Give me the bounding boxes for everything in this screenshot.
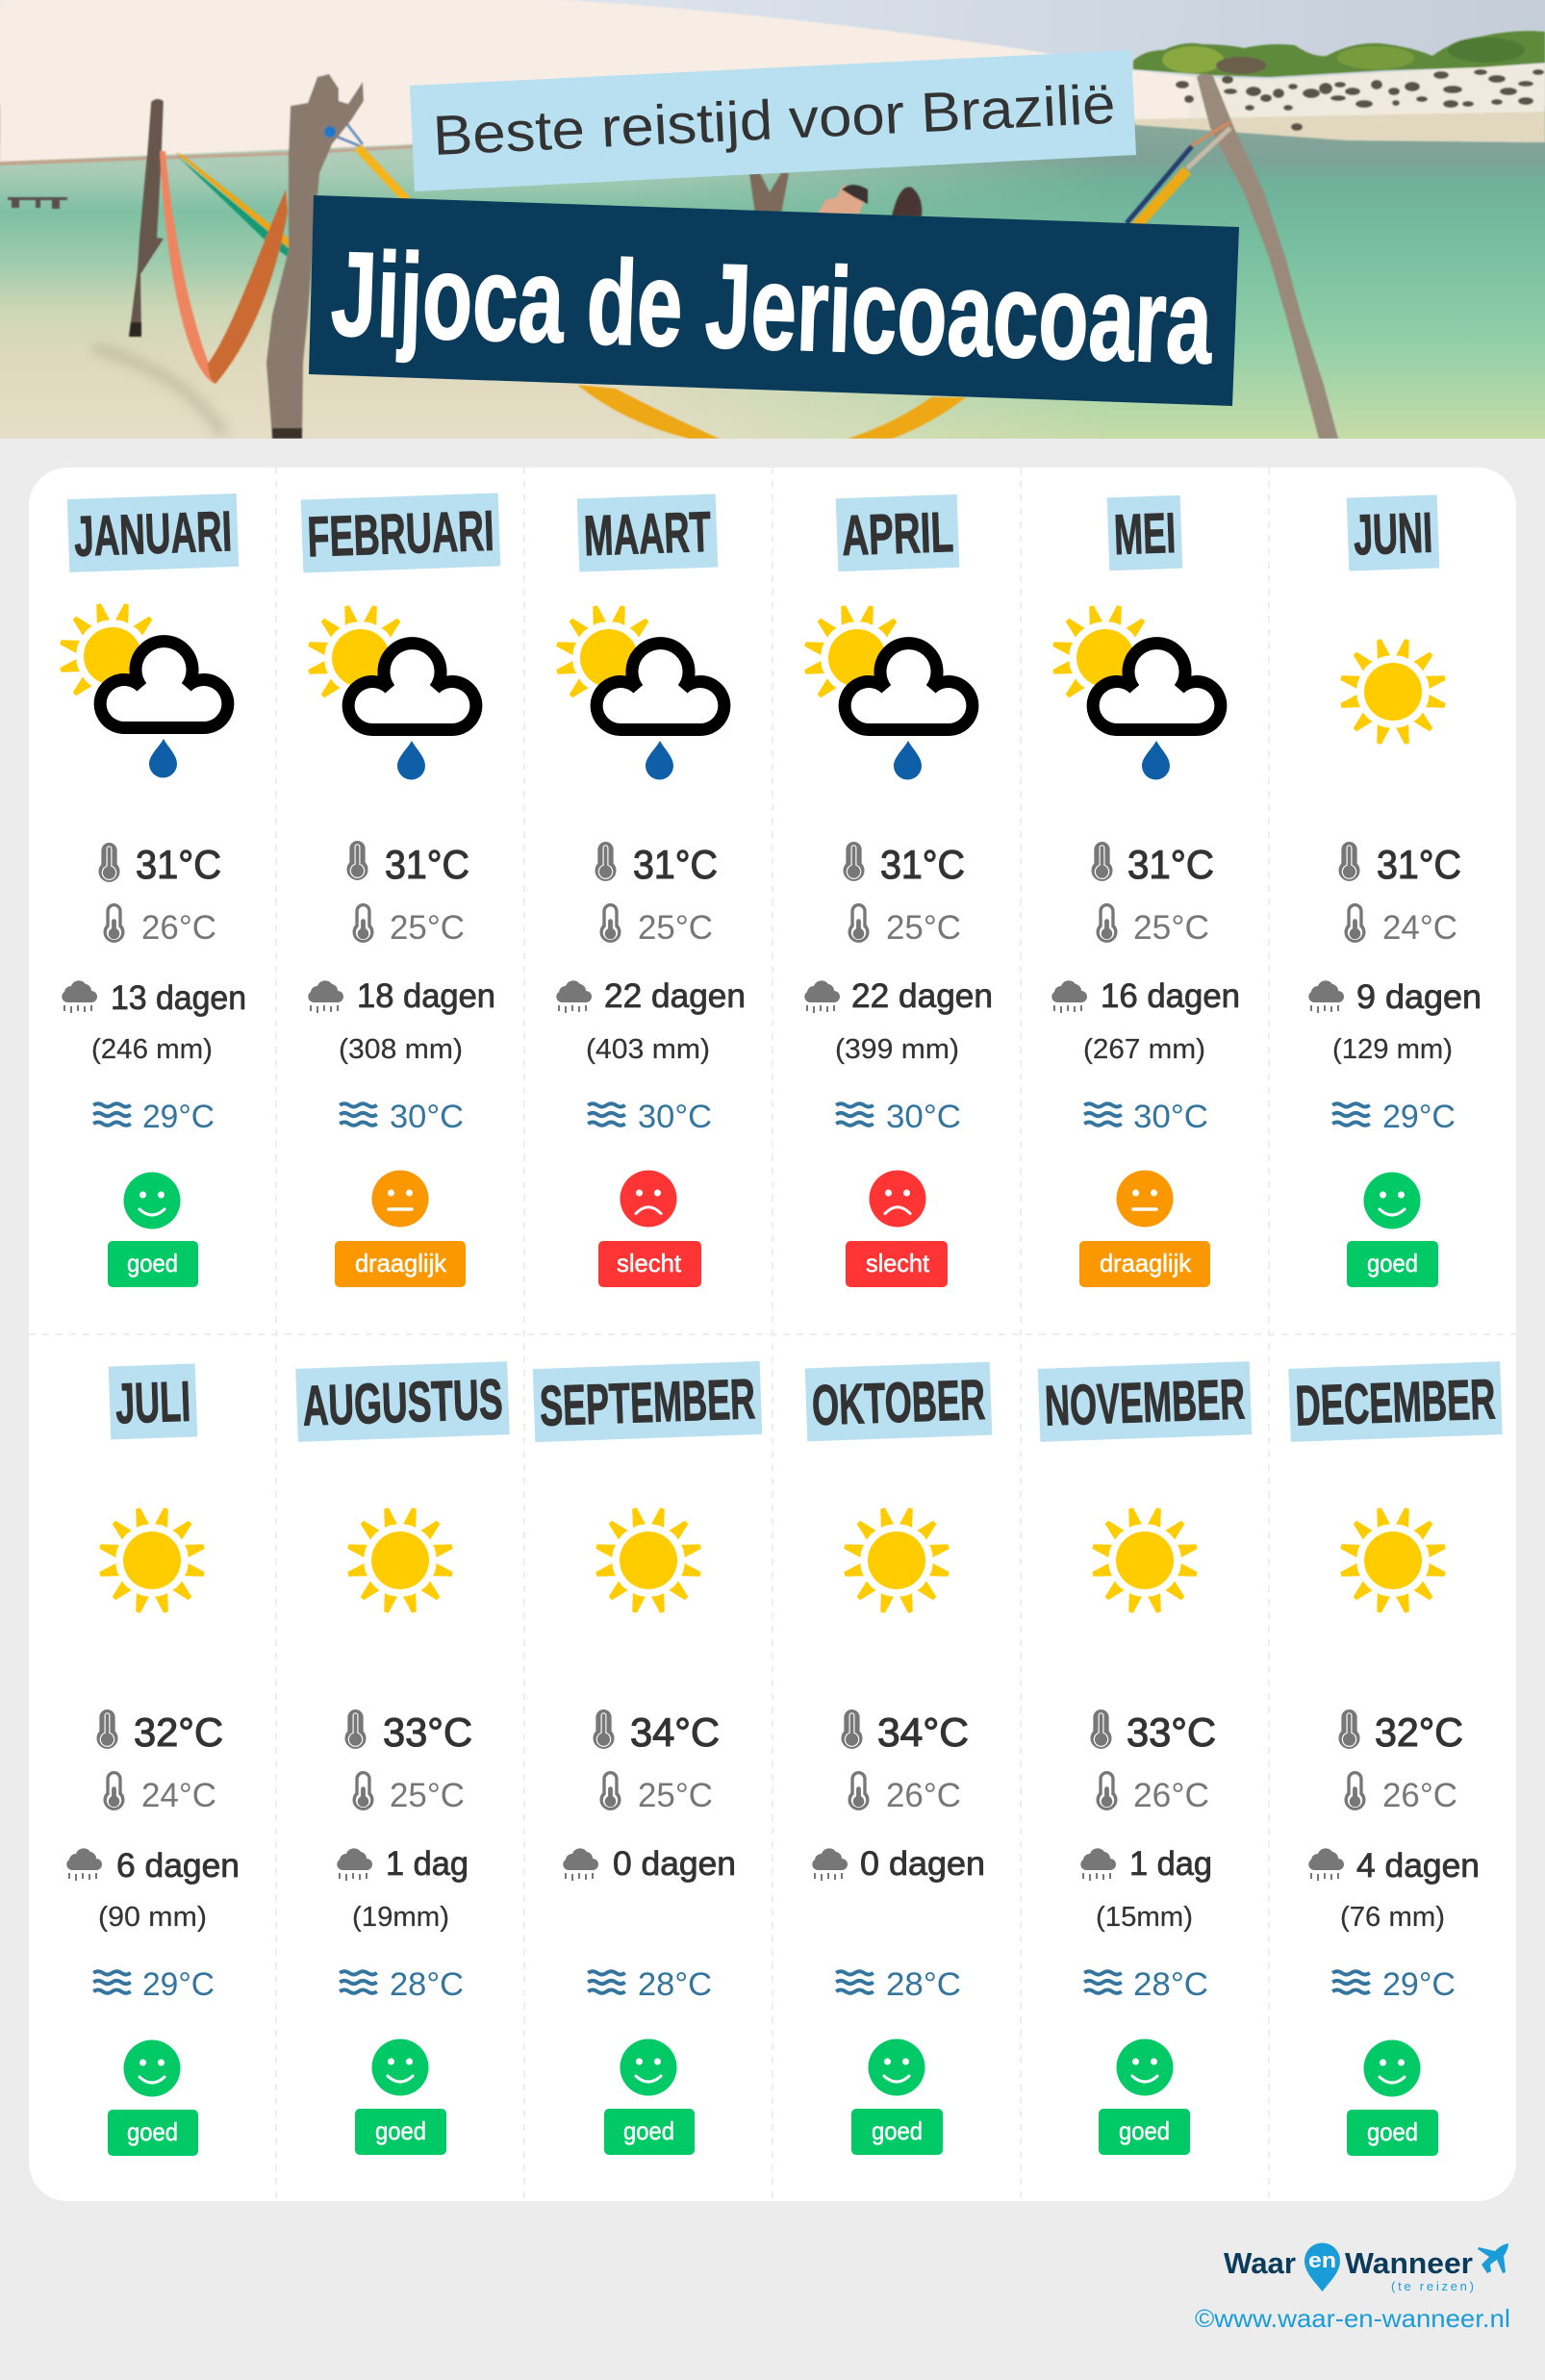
icon: max thermometer bbox=[1338, 1709, 1360, 1749]
rain days: 1 dag bbox=[386, 1845, 469, 1883]
max temperature: 33°C bbox=[1127, 1709, 1216, 1755]
icon: rain cloud bbox=[337, 1848, 372, 1881]
icon: max thermometer bbox=[344, 1709, 367, 1749]
rainfall: (403 mm) bbox=[586, 1034, 710, 1065]
rating tag: goed bbox=[1119, 2116, 1170, 2145]
rating tag bbox=[851, 2109, 943, 2155]
rating tag bbox=[846, 1241, 948, 1287]
rainfall: (308 mm) bbox=[339, 1034, 463, 1065]
icon: min thermometer bbox=[1096, 903, 1118, 943]
icon: map pin with en: en bbox=[1308, 2248, 1336, 2272]
cell: november bbox=[1038, 1361, 1252, 2155]
icon: waves bbox=[93, 1971, 131, 1993]
month label: MEI bbox=[1113, 501, 1177, 567]
month label bbox=[577, 494, 718, 571]
icon: sun bbox=[1091, 1506, 1199, 1614]
icon: min thermometer bbox=[1096, 1771, 1118, 1810]
icon: happy face bbox=[868, 2039, 925, 2095]
icon: max thermometer bbox=[96, 1709, 118, 1749]
icon: happy face bbox=[371, 2039, 429, 2095]
rating tag: goed bbox=[127, 1249, 178, 1278]
logo tagline: (te reizen) bbox=[1391, 2279, 1474, 2293]
icon: waves bbox=[1084, 1103, 1122, 1126]
max temperature: 31°C bbox=[1377, 842, 1461, 887]
rating tag bbox=[598, 1241, 701, 1287]
sea temperature: 29°C bbox=[1382, 1099, 1456, 1135]
rating tag bbox=[1099, 2109, 1190, 2155]
rain days: 0 dagen bbox=[613, 1845, 736, 1883]
cell: juli bbox=[66, 1363, 240, 2156]
icon: sun bbox=[1339, 1506, 1447, 1614]
min temperature: 26°C bbox=[886, 1777, 961, 1814]
icon: rain cloud bbox=[1308, 980, 1344, 1013]
icon: min thermometer bbox=[103, 903, 125, 943]
rating tag bbox=[604, 2109, 695, 2155]
icon: happy face bbox=[123, 1172, 181, 1229]
month label: MAART bbox=[583, 500, 712, 568]
panel: months grid bbox=[29, 468, 1516, 2201]
icon: map pin with en bbox=[1304, 2243, 1340, 2291]
icon: sad face bbox=[870, 1170, 925, 1228]
month label: JULI bbox=[114, 1370, 191, 1435]
icon: min thermometer bbox=[599, 1771, 621, 1810]
month label: JUNI bbox=[1353, 501, 1433, 567]
icon: max thermometer bbox=[1091, 842, 1113, 881]
sea temperature: 30°C bbox=[886, 1099, 961, 1135]
icon: rain cloud bbox=[66, 1848, 102, 1881]
max temperature: 33°C bbox=[383, 1709, 472, 1755]
icon: waves bbox=[588, 1971, 625, 1993]
month label bbox=[301, 493, 500, 573]
rain days: 0 dagen bbox=[860, 1845, 985, 1883]
icon: airplane bbox=[1478, 2243, 1508, 2273]
rating tag: draaglijk bbox=[355, 1249, 447, 1278]
icon: min thermometer bbox=[1344, 903, 1366, 943]
rating tag: slecht bbox=[866, 1249, 930, 1278]
rainfall: (129 mm) bbox=[1332, 1034, 1453, 1065]
logo word: Waar: Waar bbox=[1224, 2246, 1296, 2280]
max temperature: 34°C bbox=[630, 1709, 720, 1755]
cell: mei bbox=[1051, 495, 1240, 1287]
icon: max thermometer bbox=[595, 842, 617, 881]
icon: neutral face bbox=[371, 1170, 429, 1228]
icon: rain cloud bbox=[62, 980, 97, 1013]
cell: januari bbox=[59, 494, 246, 1287]
month label: OKTOBER bbox=[811, 1368, 986, 1437]
rain days: 13 dagen bbox=[111, 979, 246, 1017]
month label bbox=[805, 1362, 992, 1441]
month label bbox=[109, 1363, 197, 1440]
month label bbox=[1347, 494, 1439, 571]
min temperature: 24°C bbox=[141, 1777, 216, 1814]
cell: april bbox=[803, 494, 993, 1287]
icon: waves bbox=[836, 1103, 874, 1126]
rain days: 9 dagen bbox=[1356, 978, 1482, 1016]
min temperature: 25°C bbox=[638, 909, 713, 947]
icon: sun bbox=[346, 1506, 454, 1614]
sea temperature: 30°C bbox=[390, 1099, 464, 1135]
rating tag bbox=[1079, 1241, 1210, 1287]
rating tag: goed bbox=[1367, 2117, 1418, 2146]
icon: max thermometer bbox=[843, 842, 865, 881]
icon: max thermometer bbox=[346, 841, 368, 880]
rain days: 1 dag bbox=[1129, 1845, 1212, 1883]
rain days: 16 dagen bbox=[1101, 977, 1240, 1015]
max temperature: 32°C bbox=[1375, 1709, 1463, 1755]
rating tag: goed bbox=[623, 2116, 674, 2145]
rainfall: (19mm) bbox=[352, 1902, 449, 1933]
website credit: ©www.waar-en-wanneer.nl bbox=[1195, 2304, 1510, 2333]
icon: happy face bbox=[1364, 2039, 1420, 2097]
logo word: Wanneer: Wanneer bbox=[1345, 2246, 1473, 2280]
icon: min thermometer bbox=[1344, 1771, 1366, 1810]
title banner bbox=[309, 195, 1239, 406]
rainfall: (399 mm) bbox=[835, 1034, 959, 1065]
sea temperature: 30°C bbox=[1133, 1099, 1208, 1135]
icon: min thermometer bbox=[599, 903, 621, 943]
icon: sun bbox=[843, 1506, 950, 1614]
rating tag bbox=[1347, 1241, 1438, 1287]
icon: min thermometer bbox=[848, 1771, 870, 1810]
icon: rain cloud bbox=[1051, 980, 1087, 1013]
min temperature: 25°C bbox=[1133, 909, 1209, 947]
month label: SEPTEMBER bbox=[539, 1367, 756, 1438]
icon: rain cloud bbox=[308, 980, 343, 1013]
rain days: 4 dagen bbox=[1356, 1847, 1480, 1885]
month label: JANUARI bbox=[73, 499, 233, 569]
rating tag bbox=[335, 1241, 466, 1287]
icon: sad face bbox=[620, 1170, 677, 1228]
max temperature: 34°C bbox=[877, 1709, 969, 1755]
rating tag: goed bbox=[127, 2117, 178, 2146]
sea temperature: 30°C bbox=[638, 1099, 712, 1135]
month label: NOVEMBER bbox=[1044, 1367, 1246, 1438]
cell: februari bbox=[301, 493, 500, 1287]
sea temperature: 29°C bbox=[1382, 1966, 1456, 2003]
max temperature: 31°C bbox=[1127, 842, 1214, 887]
rainfall: (15mm) bbox=[1096, 1902, 1193, 1933]
month label bbox=[67, 494, 239, 572]
max temperature: 31°C bbox=[880, 842, 965, 887]
rainfall: (246 mm) bbox=[91, 1034, 213, 1065]
cell: oktober bbox=[805, 1362, 992, 2155]
icon: max thermometer bbox=[1338, 842, 1360, 881]
icon: max thermometer bbox=[1090, 1709, 1112, 1749]
month label: AUGUSTUS bbox=[301, 1367, 504, 1438]
icon: neutral face bbox=[1116, 1170, 1174, 1228]
rainfall: (90 mm) bbox=[98, 1902, 207, 1933]
icon: waves bbox=[1332, 1103, 1370, 1126]
icon: max thermometer bbox=[98, 843, 120, 882]
icon: happy face bbox=[1364, 1172, 1420, 1229]
icon: max thermometer bbox=[841, 1709, 863, 1749]
rating tag bbox=[355, 2109, 446, 2155]
icon: rain cloud bbox=[563, 1848, 598, 1881]
max temperature: 32°C bbox=[134, 1709, 223, 1755]
min temperature: 25°C bbox=[390, 1777, 465, 1814]
rainfall: (267 mm) bbox=[1083, 1034, 1205, 1065]
logo: Waar en Wanneer bbox=[1224, 2243, 1508, 2293]
icon: sun bbox=[1339, 638, 1447, 746]
rating tag: goed bbox=[1367, 1249, 1418, 1278]
min temperature: 26°C bbox=[141, 909, 216, 947]
icon: waves bbox=[1084, 1971, 1122, 1993]
icon: rain cloud bbox=[556, 980, 592, 1013]
icon: waves bbox=[1332, 1971, 1370, 1993]
icon: rain cloud bbox=[804, 980, 840, 1013]
rain days: 6 dagen bbox=[116, 1847, 240, 1885]
icon: waves bbox=[588, 1103, 625, 1126]
min temperature: 26°C bbox=[1133, 1777, 1209, 1814]
sea temperature: 28°C bbox=[1133, 1966, 1208, 2003]
min temperature: 24°C bbox=[1382, 909, 1457, 947]
rain days: 18 dagen bbox=[357, 977, 495, 1015]
month label bbox=[1038, 1361, 1252, 1442]
sea temperature: 28°C bbox=[390, 1966, 464, 2003]
icon: min thermometer bbox=[103, 1771, 125, 1810]
rainfall: (76 mm) bbox=[1340, 1902, 1445, 1933]
max temperature: 31°C bbox=[136, 842, 221, 887]
month label bbox=[295, 1361, 510, 1442]
cell: augustus bbox=[295, 1361, 510, 2155]
rating tag bbox=[1347, 2110, 1438, 2156]
icon: sun and rain cloud bbox=[307, 604, 476, 779]
rating tag bbox=[108, 2110, 198, 2156]
month label bbox=[836, 494, 959, 571]
icon: min thermometer bbox=[848, 903, 870, 943]
icon: min thermometer bbox=[352, 903, 374, 943]
rating tag: draaglijk bbox=[1100, 1249, 1192, 1278]
month label: FEBRUARI bbox=[306, 499, 495, 569]
subtitle banner bbox=[410, 50, 1136, 191]
rating tag: slecht bbox=[617, 1249, 682, 1278]
month label bbox=[1107, 495, 1182, 570]
sea temperature: 28°C bbox=[638, 1966, 712, 2003]
cell: maart bbox=[555, 494, 746, 1287]
sea temperature: 28°C bbox=[886, 1966, 961, 2003]
icon: waves bbox=[340, 1103, 377, 1126]
max temperature: 31°C bbox=[633, 842, 718, 887]
icon: rain cloud bbox=[812, 1848, 848, 1881]
cell: september bbox=[533, 1361, 762, 2155]
icon: happy face bbox=[1116, 2039, 1174, 2095]
rating tag: goed bbox=[872, 2116, 923, 2145]
rain days: 22 dagen bbox=[851, 977, 993, 1015]
icon: sun and rain cloud bbox=[555, 604, 724, 779]
icon: happy face bbox=[620, 2039, 677, 2095]
min temperature: 25°C bbox=[390, 909, 465, 947]
cell: juni bbox=[1308, 494, 1482, 1287]
sea temperature: 29°C bbox=[142, 1099, 215, 1135]
min temperature: 26°C bbox=[1382, 1777, 1457, 1814]
icon: sun bbox=[98, 1506, 206, 1614]
subtitle text: Beste reistijd voor Brazilië bbox=[432, 73, 1117, 167]
icon: max thermometer bbox=[593, 1709, 615, 1749]
icon: waves bbox=[340, 1971, 377, 1993]
month label: APRIL bbox=[841, 500, 954, 568]
rating tag bbox=[108, 1241, 198, 1287]
icon: sun and rain cloud bbox=[803, 604, 973, 779]
month label bbox=[533, 1361, 762, 1442]
header photo: beach with hammocks bbox=[0, 0, 1545, 439]
icon: rain cloud bbox=[1080, 1848, 1116, 1881]
max temperature: 31°C bbox=[385, 842, 469, 887]
sea temperature: 29°C bbox=[142, 1966, 215, 2003]
icon: min thermometer bbox=[352, 1771, 374, 1810]
cell: december bbox=[1288, 1361, 1503, 2156]
min temperature: 25°C bbox=[886, 909, 961, 947]
min temperature: 25°C bbox=[638, 1777, 713, 1814]
icon: happy face bbox=[123, 2039, 181, 2097]
rain days: 22 dagen bbox=[604, 977, 746, 1015]
icon: sun and rain cloud bbox=[59, 602, 228, 777]
icon: sun and rain cloud bbox=[1051, 604, 1221, 779]
rating tag: goed bbox=[375, 2116, 426, 2145]
icon: waves bbox=[836, 1971, 874, 1993]
icon: rain cloud bbox=[1308, 1848, 1344, 1881]
icon: sun bbox=[595, 1506, 702, 1614]
icon: waves bbox=[93, 1103, 131, 1126]
